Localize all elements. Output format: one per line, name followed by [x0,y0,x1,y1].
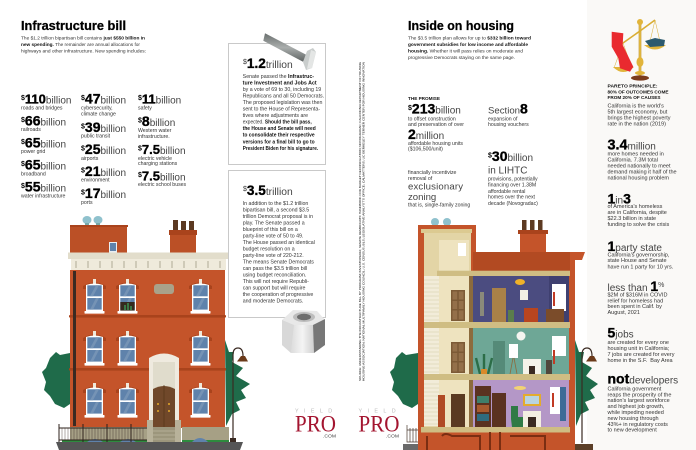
spending list: column 3: $ [138,172,142,179]
stat: not developers [606,371,678,434]
spending list: column 2: $ [81,124,85,130]
spending list: column 2: ports [81,200,93,206]
cutaway building illustration [390,218,598,450]
callout: $1.2 trillion: ture Investment and Jobs Act [243,80,317,86]
callout: $1.2 trillion: expected. Should the bill pass, [243,120,312,126]
street lamp [582,348,597,443]
callout: $3.5 trillion: $ [243,186,247,193]
basement pipes [427,432,545,450]
spending list: column 3: 11 [142,92,156,107]
spending list: column 3: $ [138,118,142,124]
intro text: infrastructure bill: new spending. The remainder are annual allocations for [21,42,140,47]
stat: less than 1 percent [608,278,667,316]
spending list: column 3: billion [160,172,186,183]
intro text: infrastructure bill [21,35,146,54]
callout: $1.2 trillion: the House and Senate will need [243,126,316,132]
stat: less than 1 percent: $2M of $316M in COVID [608,292,667,298]
callout: $1.2 trillion: tives where adjustments are [243,113,308,119]
stat: less than 1 percent: August, 2021 [608,310,640,316]
callout: $1.2 trillion [228,44,326,164]
spending list: column 1: 55 [25,179,41,195]
stat: not developers: nation's largest workforce [608,398,670,404]
stat: not developers: reaps the prosperity of the [608,392,671,398]
heading: inside on housing: Inside on housing [408,19,514,33]
callout: $3.5 trillion: This will not require Republi- [243,279,309,285]
stat: 1 party state: have run 1 party for 10 yrs. [608,264,674,270]
callout: $3.5 trillion: budget resolution on a [243,247,295,253]
callout: $3.5 trillion: play. The Senate passed a [243,220,305,226]
stat: 1 party state [608,238,674,270]
spending list: column 1: billion [40,118,66,129]
stat: 3.4 million: 3.4million [608,138,656,154]
callout: $1.2 trillion: sent to the House of Representa- [243,107,320,113]
spending list: column 3: billion [150,118,175,129]
stat: 5 jobs: 5jobs [608,324,634,340]
housing promise: column 2: provisions, potentially [488,177,538,183]
stat: 5 jobs: 7 jobs are created for every [608,352,675,358]
callout: $3.5 trillion: party-line vote of 50 to 49. [243,234,303,240]
stat: less than 1 percent: % [658,282,664,289]
callout: $3.5 trillion: using budget reconciliation. [243,273,306,279]
spending list: column 1: water infrastructure [21,194,66,200]
stat: 3.4 million: more homes needed in [608,152,664,158]
stat: 1 in 3: $22.3 billion in state [608,216,656,222]
room: teal studio [473,328,569,374]
spending list: column 1: $ [21,95,25,102]
housing promise: column 2: 30 [492,148,508,164]
rooftop attic and vents [70,216,128,253]
callout: $1.2 trillion: versions for a final bill to go to [243,139,315,145]
tree: left of building [42,352,70,408]
spending list: column 3: 7.5 [142,142,160,157]
stat: not developers: new housing through [608,416,659,422]
spending list: column 1: broadband [21,172,46,178]
callout: $3.5 trillion: blueprint of this bill on a [243,227,298,233]
text: California poverty: rate in the nation (2019) [608,121,666,127]
text: California poverty [608,103,671,127]
stat: 3.4 million [608,138,677,181]
drain pipe [73,271,76,426]
housing promise: column 1: exclusionary [408,181,463,192]
spending list: column 3: electric school buses [138,182,187,188]
housing promise: column 1: that is, single-family zoning [408,203,470,209]
spending list: column 3: 8 [142,113,150,129]
housing promise: column 1 [408,96,470,209]
stat: 1 party state: California's governorship, [608,252,670,258]
stat: 5 jobs: housing unit in California; [608,346,670,352]
stat: 1 party state: state House and Senate [608,258,667,264]
stat: 1 in 3: 1in3 [608,190,631,206]
callout: $3.5 trillion: the cooperation of progressive [243,292,313,298]
callout: $3.5 trillion: In addition to the $1.2 trillion [243,201,308,207]
spending list: column 1: billion [40,162,66,173]
building shell [418,225,585,450]
spending list: column 2: $ [81,146,85,152]
spending list: column 2: $ [81,95,85,102]
stat: 5 jobs: are created for every one [608,340,669,346]
fence and base [407,425,418,442]
spending list: column 3: billion [160,146,186,157]
spending list: column 1: 66 [25,113,41,129]
callout: $1.2 trillion: $ [243,59,247,66]
callout: $1.2 trillion: 1.2 [247,56,266,71]
spending list: column 3: $ [138,146,142,152]
housing promise: column 1: zoning [408,192,436,203]
intro text: housing: progressive Democrats staying on the same page. [408,55,515,60]
housing promise: column 2: decade (Novogradac) [488,201,538,207]
stat: not developers: to new development [608,428,657,434]
callout: $1.2 trillion: to consolidate their respective [243,133,315,139]
spending list: column 1: billion [40,140,66,151]
spending list: column 2: cybersecurity, [81,105,113,111]
floor slabs [421,271,570,432]
stat: less than 1 percent: relief for homeless had [608,298,663,304]
stat: 1 in 3 [608,190,670,228]
spending list: column 3: infrastructure. [138,134,170,140]
callout: $3.5 trillion: The House passed an identical [243,240,315,246]
spending list: column 1: $ [21,117,25,124]
housing promise: column 2: billion [507,153,533,164]
spending list: column 2: 47 [85,91,101,107]
tree: right of building [225,340,250,426]
callout: $3.5 trillion: can support but will require [243,285,306,291]
logo: Yield Pro: YIELD [295,409,338,415]
date plaque [154,284,174,294]
pavement [56,442,243,450]
spending list: column 2: airports [81,156,99,162]
tree: right of cutaway [575,340,598,426]
stat: 3.4 million: needed nationally to meet [608,163,671,169]
chimney [169,220,197,253]
spending list: column 1 [21,92,71,200]
stat: 1 in 3: are in California, despite [608,210,667,216]
spending list: column 1: billion [46,96,71,107]
spending list: column 1: power grid [21,149,45,155]
spending list: column 3: Western water [138,128,172,134]
spending list: column 2: 25 [85,141,101,157]
spending list: column 1: billion [40,184,66,195]
housing promise: column 1: to offset construction [408,117,456,123]
spending list: column 2: climate change [81,112,116,118]
stat: 5 jobs: home in the S.F. Bay Area [608,358,674,364]
callout: $3.5 trillion: and moderate Democrats. [243,299,303,305]
logo: Yield Pro: .COM [323,434,336,439]
spending list: column 2 [81,91,126,206]
stat: 3.4 million: national housing problem [608,175,669,181]
logo: Yield Pro second: PRO [358,412,400,437]
callout: $1.2 trillion: Republicans and all 50 Democrats. [243,94,324,100]
intro text: infrastructure bill: The $1.2 trillion bipartisan bill contains just $550 billion in [21,35,145,40]
callout: $1.2 trillion: by a vote of 69 to 30, including 19 [243,87,321,93]
intro text: infrastructure bill: highways and other infrastructure. New spending includes: [21,49,146,54]
logo: Yield Pro second: YIELD [358,409,401,415]
spending list: column 1: 65 [25,135,41,151]
icon: Pareto balance scale with California [612,19,666,81]
spending list: column 2: 21 [85,163,101,179]
spending list: column 1: $ [21,161,25,168]
housing promise: column 2: homes over the next [488,195,536,201]
callout: $3.5 trillion: 3.5 [247,183,266,198]
stair hall [424,233,473,427]
source note (vertical) [358,61,366,381]
spending list: column 2: 17 [85,185,101,201]
callout: $1.2 trillion: The proposed legislation was then [243,100,322,106]
intro text: housing: housing. Whether it will pass relies on moderate and [408,49,523,54]
housing promise: column 1: and preservation of over [408,122,464,128]
spending list: column 2: 39 [85,119,101,135]
text: California poverty: brings the highest poverty [608,115,671,121]
right page background panel [587,0,696,450]
spending list: column 3: safety [138,105,152,111]
intro text: housing: The $3.5 trillion plan allows for up to $332 billion toward [408,35,531,40]
housing promise: column 1: 213 [412,100,435,116]
callout: $3.5 trillion: The means Senate Democrats [243,260,314,266]
spending list: column 2: environment [81,178,110,184]
logo: Yield Pro: PRO [295,412,336,437]
spending list: column 2: $ [81,168,85,174]
callout: $3.5 trillion: trillion Democrat proposal is in [243,214,313,220]
heading: Pareto principle: 80% OF OUTCOMES COME [608,89,668,94]
source note (vertical): SOURCE: UNDERSTANDING THE INFRASTRUCTURE BILL BY PROGRAM; INVESTOPEDIA; SENATE DEMOCRATS' HANDBOOK FOR BUDGET RECONCILIATION; NOVOGRADAC; CALIFORNIA DEPARTMENT OF HOUSING [358,61,362,381]
stat: 1 party state: 1party state [608,238,662,254]
stat: less than 1 percent: been spent in Calif. by [608,304,662,310]
building body [70,270,225,428]
callout: $1.2 trillion: Senate passed the Infrastruc- [243,74,314,80]
stat: not developers: while impeding needed [606,410,664,416]
callout: $1.2 trillion: trillion [266,60,293,71]
spending list: column 2: public transit [81,134,111,140]
housing promise: column 1: 2million [408,126,444,142]
building exterior illustration [42,216,250,450]
callout: $3.5 trillion: bipartisan bill, a second $3.5 [243,207,309,213]
heading: infrastructure bill: Infrastructure bill [21,19,126,33]
housing promise: column 1: billion [435,105,461,116]
logo: Yield Pro second: .COM [386,434,399,439]
icon: bolt [263,33,316,70]
housing promise: column 2 [488,100,538,207]
spending list: column 3: 7.5 [142,168,160,183]
stat: 5 jobs [608,324,675,364]
housing promise: column 1: affordable housing units [408,141,463,147]
callout: $3.5 trillion: trillion [266,187,293,198]
housing promise: column 2: financing over 1.38M [488,183,536,189]
housing promise: column 2: expansion of [488,117,518,123]
housing promise: column 2: affordable rental [488,189,525,195]
iron fence [59,424,147,442]
spending list: column 2: billion [100,168,126,179]
spending list: column 2: billion [100,96,126,107]
callout: $1.2 trillion: President Biden for his signature. [243,146,319,152]
housing promise: column 2: $ [488,152,492,160]
source note (vertical): HOUSING ASSOCIATION; NATIONAL MULTIFAMILY HOUSING COUNCIL; U.S. CENSUS; BLS; LEGISLATIVE ANALYST'S OFFICE; CALMATTERS; UC BERKELEY TERNER CENTER FOR HOUSING INNOVATION [362,62,366,381]
callout: $3.5 trillion [228,170,326,318]
stat: not developers: and highest job growth, [608,404,665,410]
housing promise: column 1: financially incentivize [408,170,457,176]
spending list: column 1: $ [21,183,25,190]
stat: not developers: California government [608,386,662,392]
front door [149,354,179,427]
cornice [68,252,236,270]
callout: $3.5 trillion: party-line vote of 220-212. [243,253,304,259]
street lamp [230,348,248,443]
spending list: column 1: $ [21,139,25,146]
heading: Pareto principle: PARETO PRINCIPLE: [608,84,658,89]
spending list: column 3 [138,92,187,188]
spending list: column 2: billion [100,146,126,157]
spending list: column 1: railroads [21,127,41,133]
stat: less than 1 percent: less than 1 [608,278,658,294]
housing promise: column 2: Section8 [488,100,528,116]
intro text: housing [408,35,531,60]
heading: Pareto principle [608,84,668,100]
spending list: column 2: billion [100,124,126,135]
housing promise: column 1: THE PROMISE [408,96,440,101]
text: California poverty: California is the world's [608,103,664,109]
callout: $3.5 trillion: can pass the $3.5 trillion bill [243,266,307,272]
spending list: column 3: $ [138,95,142,102]
room: lilac library [473,380,569,427]
chimney and vents [431,218,548,255]
stat: not developers: 43%+ in regulatory costs [608,422,668,428]
spending list: column 2: billion [100,190,126,201]
text: California poverty: 5th largest economy, but [608,109,668,115]
front steps and base [62,420,229,442]
spending list: column 1: 65 [25,157,41,173]
spending list: column 3: charging stations [138,161,178,167]
stat: 1 in 3: of America's homeless [608,204,663,210]
icon: nut [282,310,325,353]
stat: 1 in 3: funding to solve the crisis [608,222,670,228]
housing promise: column 1: removal of [408,176,433,182]
housing promise: column 2: in LIHTC [488,165,527,176]
spending list: column 3: billion [156,96,181,107]
tree: left of cutaway [390,352,418,408]
housing promise: column 2: housing vouchers [488,122,529,128]
spending list: column 1: 110 [25,92,46,107]
stat: not developers: notdevelopers [608,371,678,387]
spending list: column 2: $ [81,190,85,196]
heading: Pareto principle: FROM 20% OF CAUSES [608,95,660,100]
housing promise: column 1: ($106,500/unit) [408,147,443,153]
spending list: column 1: roads and bridges [21,105,63,111]
room: upper study [473,276,569,322]
spending list: column 3: electric vehicle [138,156,172,162]
stat: 3.4 million: California. 7.3M total [608,157,658,163]
intro text: housing: government subsidies for low income and affordable [408,42,528,47]
stat: 3.4 million: demand making it half of the [608,169,677,175]
windows [83,279,212,418]
housing promise: column 1: $ [408,105,412,112]
